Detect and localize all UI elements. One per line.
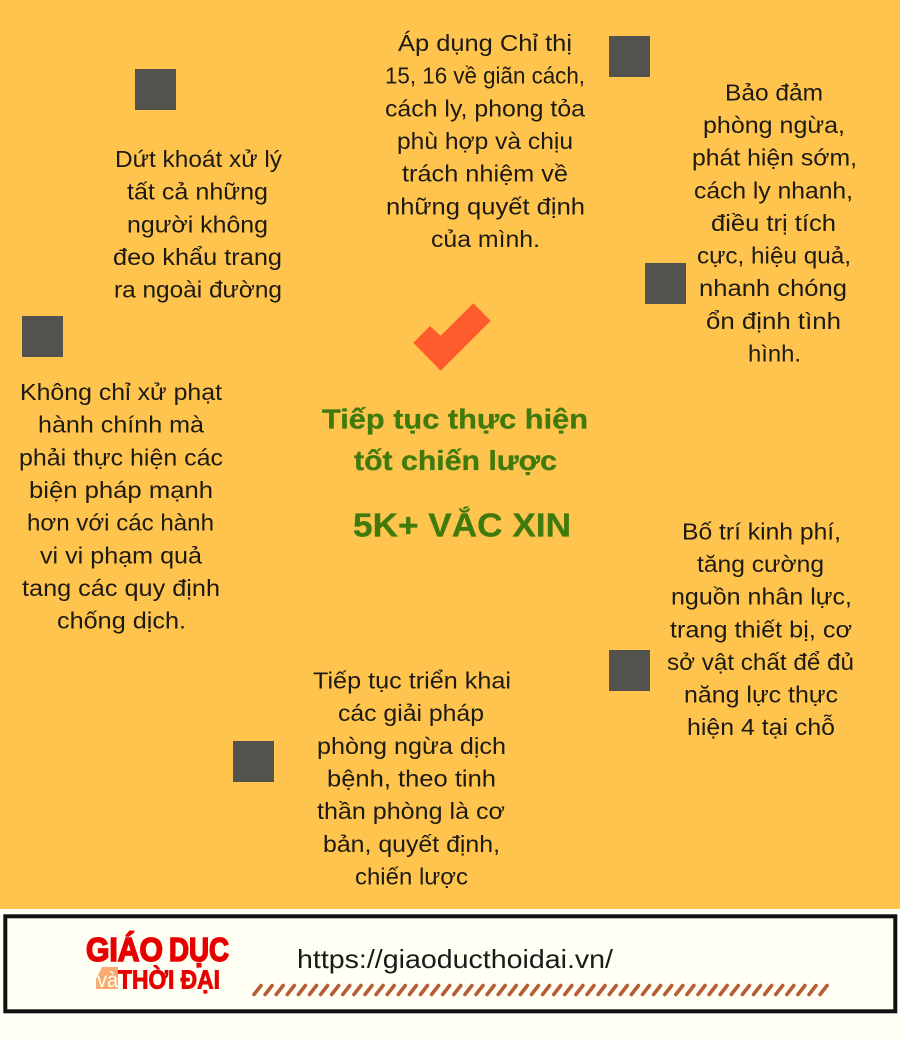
icon: square left [22, 316, 63, 357]
text block: apply directives 15, 16 [385, 30, 585, 252]
text block: stronger measures for violations: phải thực hiện các [19, 444, 223, 470]
text block: prevention and early detection: cách ly nhanh, [694, 177, 853, 203]
logo: Giáo dục và Thời đại: THỜI ĐẠI [118, 964, 220, 994]
text block: apply directives 15, 16: Áp dụng Chỉ thị [398, 30, 572, 56]
icon: square top left [135, 69, 176, 110]
footer panel [5, 916, 895, 1011]
icon: square bottom [233, 741, 274, 782]
text block: apply directives 15, 16: 15, 16 về giãn cách, [385, 63, 585, 89]
text block: prevention solutions: phòng ngừa dịch [317, 733, 506, 759]
logo: Giáo dục và Thời đại: GIÁO [86, 931, 163, 968]
text block: funding and resources: hiện 4 tại chỗ [687, 714, 835, 740]
logo: Giáo dục và Thời đại: DỤC [169, 931, 229, 968]
text block: prevention and early detection: cực, hiệu quả, [697, 243, 851, 269]
heading: continue strategy: tốt chiến lược [354, 445, 557, 476]
text block: handle people without masks: đeo khẩu trang [113, 244, 282, 270]
text block: apply directives 15, 16: của mình. [431, 226, 540, 252]
text block: funding and resources: trang thiết bị, cơ [670, 616, 852, 642]
text block: prevention and early detection: phòng ngừa, [703, 112, 845, 138]
text block: apply directives 15, 16: những quyết định [386, 193, 585, 219]
text block: prevention and early detection: điều trị tích [711, 210, 836, 236]
text block: stronger measures for violations: Không chỉ xử phạt [20, 379, 223, 405]
text block: apply directives 15, 16: cách ly, phong tỏa [385, 95, 585, 121]
text block: funding and resources: nguồn nhân lực, [671, 584, 852, 610]
heading: 5K+ vaccine: 5K+ VẮC XIN [353, 506, 571, 544]
text block: funding and resources [667, 518, 854, 740]
logo: Giáo dục và Thời đại: và [97, 969, 118, 992]
website url: https://giaoducthoidai.vn/ [297, 944, 614, 974]
text block: stronger measures for violations: tang các quy định [22, 575, 220, 601]
text block: prevention and early detection: ổn định tình [706, 308, 841, 334]
text block: prevention and early detection: hình. [748, 340, 801, 366]
text block: prevention and early detection [692, 79, 857, 367]
heading: continue strategy [322, 404, 588, 476]
icon: orange check mark [413, 303, 491, 371]
text block: handle people without masks: ra ngoài đường [114, 277, 282, 303]
text block: stronger measures for violations: chống dịch. [57, 608, 186, 634]
text block: stronger measures for violations: hành chính mà [38, 412, 204, 438]
text block: prevention solutions [313, 668, 511, 889]
text block: handle people without masks: tất cả những [127, 179, 268, 205]
text block: prevention and early detection: phát hiện sớm, [692, 145, 857, 171]
text block: stronger measures for violations [19, 379, 223, 634]
heading: continue strategy: Tiếp tục thực hiện [322, 404, 588, 434]
text block: prevention solutions: các giải pháp [338, 700, 484, 726]
text block: stronger measures for violations: biện pháp mạnh [29, 477, 213, 503]
decorative stripe line [254, 986, 827, 994]
text block: funding and resources: sở vật chất để đủ [667, 649, 854, 675]
text block: handle people without masks: Dứt khoát xử lý [115, 146, 283, 172]
text block: prevention solutions: bệnh, theo tinh [327, 765, 496, 791]
text block: funding and resources: năng lực thực [684, 682, 838, 708]
text block: funding and resources: tăng cường [697, 551, 824, 577]
icon: square top centre [609, 36, 650, 77]
text block: prevention and early detection: nhanh chóng [699, 275, 847, 301]
text block: prevention solutions: Tiếp tục triển khai [313, 668, 511, 694]
text block: prevention solutions: thần phòng là cơ [317, 798, 505, 824]
text block: stronger measures for violations: vi vi phạm quả [40, 542, 202, 568]
text block: handle people without masks: người không [127, 211, 268, 237]
text block: apply directives 15, 16: trách nhiệm về [402, 161, 568, 187]
text block: prevention and early detection: Bảo đảm [725, 79, 823, 105]
text block: handle people without masks [113, 146, 283, 303]
text block: funding and resources: Bố trí kinh phí, [682, 518, 841, 544]
text block: prevention solutions: bản, quyết định, [323, 831, 500, 857]
icon: square bottom right [609, 650, 650, 691]
text block: stronger measures for violations: hơn với các hành [27, 510, 214, 536]
text block: apply directives 15, 16: phù hợp và chịu [397, 128, 573, 154]
logo: Giáo dục và Thời đại [86, 931, 229, 994]
icon: square top right [645, 263, 686, 304]
text block: prevention solutions: chiến lược [355, 863, 468, 889]
